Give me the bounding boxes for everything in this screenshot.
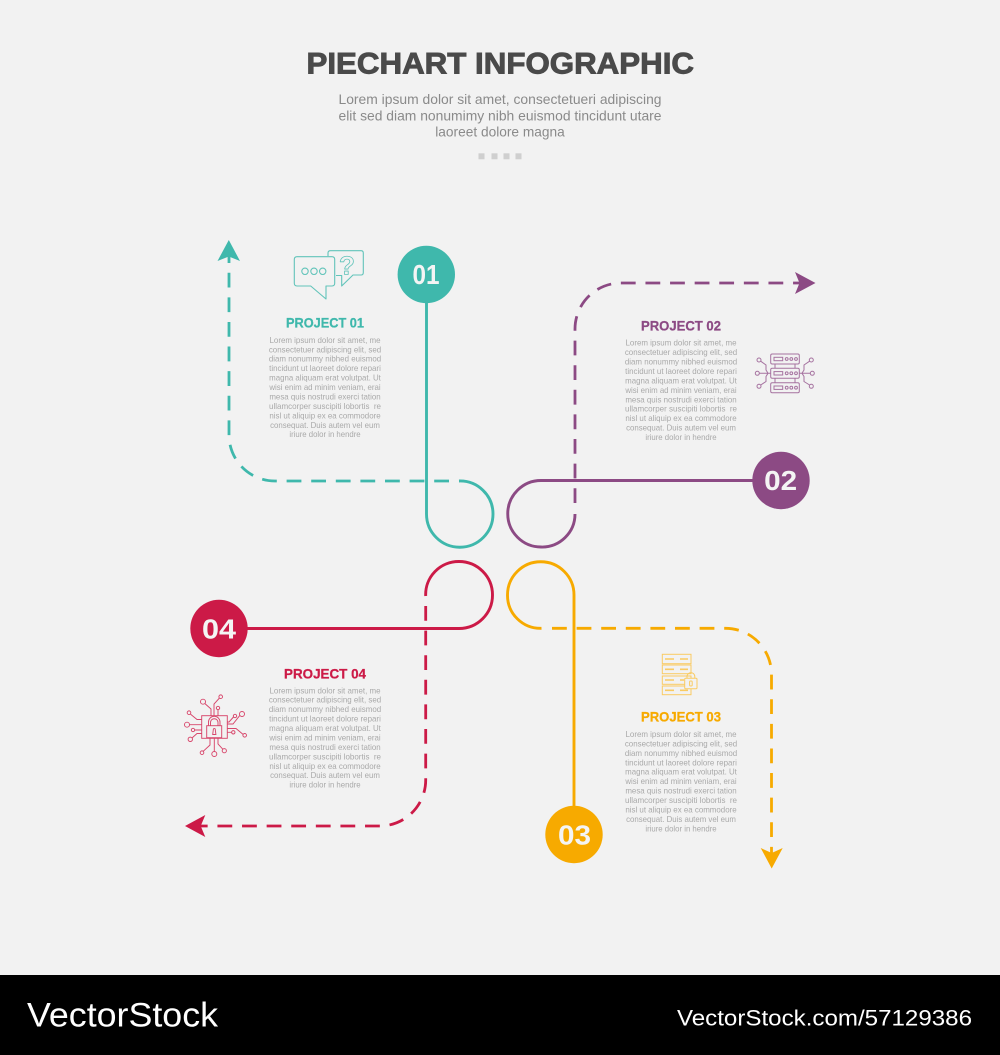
header block [306, 47, 694, 159]
arrowhead 02 [795, 272, 816, 294]
panel: project 01 [218, 240, 493, 547]
body text 01: mesa quis nostrudi exerci tation [269, 392, 381, 402]
body text 03: mesa quis nostrudi exerci tation [625, 786, 737, 796]
body text 04: Lorem ipsum dolor sit amet, me [270, 685, 381, 695]
body text 01: consequat. Duis autem vel eum [270, 420, 380, 430]
title: PIECHART INFOGRAPHIC [306, 47, 694, 80]
body text 02: nisl ut aliquip ex ea commodore [625, 413, 737, 423]
panel: project 02 [508, 272, 816, 547]
number badge 03: 03 [558, 820, 591, 850]
icon: server with lock [662, 654, 697, 695]
body text 03: nisl ut aliquip ex ea commodore [625, 804, 737, 814]
dashed arrow path 04 [200, 606, 426, 826]
number badge 04: 04 [202, 613, 236, 644]
body text 04: mesa quis nostrudi exerci tation [269, 742, 381, 752]
body text 03: ullamcorper suscipiti lobortis re [625, 795, 737, 805]
body text 04: nisl ut aliquip ex ea commodore [269, 761, 381, 771]
body text 01: iriure dolor in hendre [289, 429, 361, 439]
footer url text: VectorStock.com/57129386 [677, 1006, 972, 1031]
body text 02: consectetuer adipiscing elit, sed [625, 347, 737, 357]
body text 04: wisi enim ad minim veniam, erai [268, 732, 381, 742]
body text 01: consectetuer adipiscing elit, sed [269, 344, 381, 354]
body text 02: diam nonummy nibhed euismod [625, 357, 737, 367]
number badge 03 [545, 806, 603, 863]
body text 03: Lorem ipsum dolor sit amet, me [626, 729, 737, 739]
subtitle [338, 91, 662, 140]
body text 02: Lorem ipsum dolor sit amet, me [626, 338, 737, 348]
icon: circuit lock [184, 695, 246, 756]
heading 03: PROJECT 03 [641, 710, 721, 725]
number badge 02 [752, 452, 810, 509]
heading 01: PROJECT 01 [286, 316, 364, 331]
body text 03: tincidunt ut laoreet dolore repari [625, 757, 737, 767]
body text 04: consectetuer adipiscing elit, sed [269, 695, 381, 705]
solid connector 01 [426, 300, 493, 547]
icon: chat bubbles: ? [339, 250, 355, 280]
panel: project 04 [184, 561, 492, 837]
body text 03: wisi enim ad minim veniam, erai [624, 776, 737, 786]
body text 04: iriure dolor in hendre [289, 780, 361, 790]
body text 02: tincidunt ut laoreet dolore repari [625, 366, 737, 376]
body text 01: nisl ut aliquip ex ea commodore [269, 410, 381, 420]
icon: server network [755, 354, 814, 393]
subtitle: elit sed diam nonumimy nibh euismod tincidunt utare [338, 108, 662, 124]
body text 04: tincidunt ut laoreet dolore repari [269, 714, 381, 724]
body text 01 [268, 335, 381, 439]
body text 03: magna aliquam erat volutpat. Ut [625, 767, 737, 777]
number badge 01 [398, 246, 455, 303]
body text 04: magna aliquam erat volutpat. Ut [269, 723, 381, 733]
dashed arrow path 01 [229, 256, 449, 481]
solid connector 04 [245, 561, 492, 628]
dashed arrow path 02 [575, 283, 800, 503]
number badge 02: 02 [764, 465, 797, 496]
body text 02: ullamcorper suscipiti lobortis re [625, 404, 737, 414]
body text 01: tincidunt ut laoreet dolore repari [269, 363, 381, 373]
solid connector 02 [508, 480, 755, 547]
body text 03 [624, 729, 737, 833]
panel: project 03 [507, 562, 783, 868]
body text 04: ullamcorper suscipiti lobortis re [269, 751, 381, 761]
body text 03: iriure dolor in hendre [645, 823, 717, 833]
body text 01: Lorem ipsum dolor sit amet, me [270, 335, 381, 345]
number badge 04 [190, 600, 248, 657]
body text 02 [624, 338, 737, 442]
body text 02: mesa quis nostrudi exerci tation [625, 394, 737, 404]
subtitle: Lorem ipsum dolor sit amet, consectetueri adipiscing [338, 91, 662, 107]
heading 02: PROJECT 02 [641, 319, 721, 334]
body text 03: diam nonummy nibhed euismod [625, 748, 737, 758]
icon: chat bubbles [294, 250, 363, 299]
body text 02: magna aliquam erat volutpat. Ut [625, 375, 737, 385]
footer bar [0, 975, 1000, 1055]
body text 04: consequat. Duis autem vel eum [270, 770, 380, 780]
body text 01: diam nonummy nibhed euismod [269, 354, 381, 364]
body text 02: iriure dolor in hendre [645, 432, 717, 442]
body text 04 [268, 685, 381, 790]
arrowhead 04 [185, 815, 205, 837]
heading 04: PROJECT 04 [284, 666, 366, 681]
subtitle: laoreet dolore magna [435, 124, 565, 140]
solid connector 03 [507, 562, 574, 809]
title dots [478, 153, 522, 159]
arrowhead 01 [218, 240, 240, 261]
body text 01: magna aliquam erat volutpat. Ut [269, 373, 381, 383]
body text 01: wisi enim ad minim veniam, erai [268, 382, 381, 392]
dashed arrow path 03 [552, 628, 772, 853]
body text 02: wisi enim ad minim veniam, erai [624, 385, 737, 395]
arrowhead 03 [761, 848, 783, 868]
body text 03: consectetuer adipiscing elit, sed [625, 738, 737, 748]
body text 02: consequat. Duis autem vel eum [626, 423, 736, 433]
body text 01: ullamcorper suscipiti lobortis re [269, 401, 381, 411]
body text 03: consequat. Duis autem vel eum [626, 814, 736, 824]
body text 04: diam nonummy nibhed euismod [269, 704, 381, 714]
footer logo text: VectorStock [27, 996, 219, 1034]
number badge 01: 01 [412, 259, 440, 290]
